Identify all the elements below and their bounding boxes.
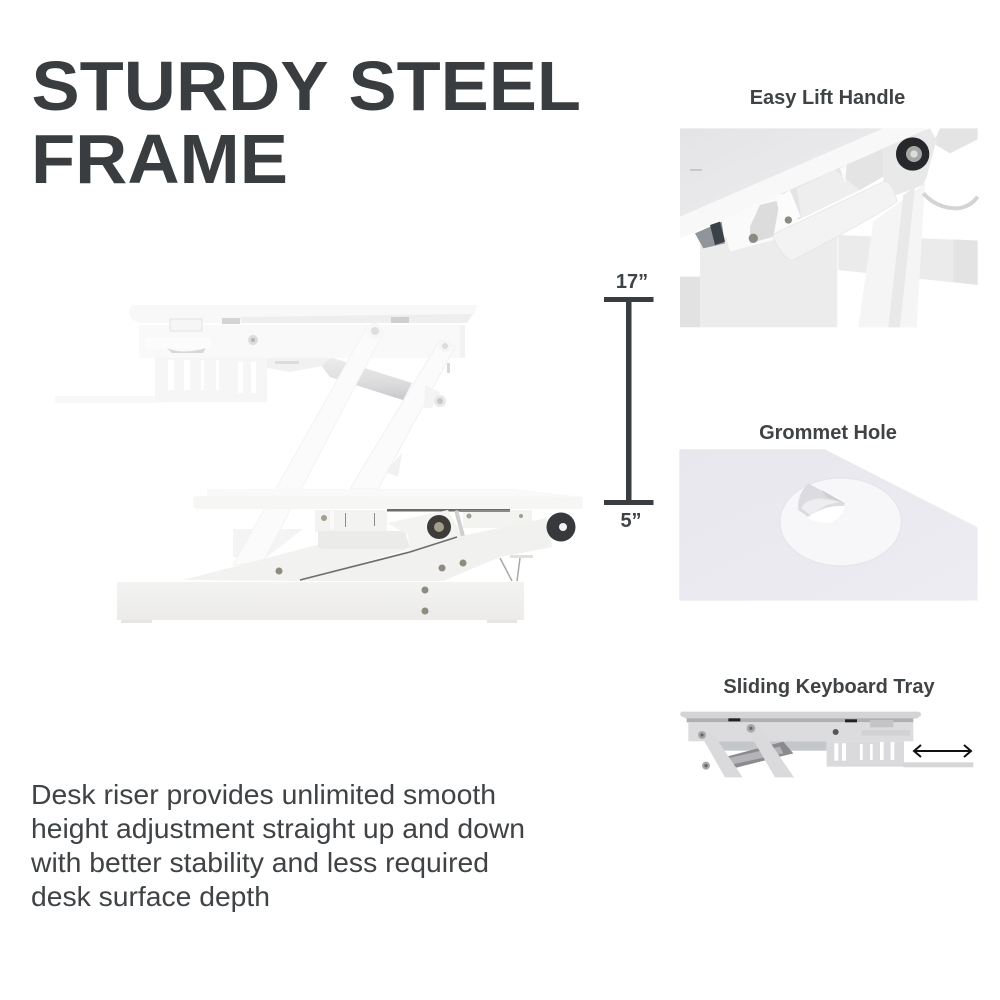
arrow: tray slide direction — [914, 745, 971, 757]
label: 17 inches: 17” — [616, 271, 648, 293]
photo: sliding keyboard tray — [680, 712, 973, 777]
height scale — [604, 271, 654, 532]
upper bracket rail — [139, 319, 465, 358]
title — [31, 47, 581, 198]
heading: sliding keyboard tray: Sliding Keyboard Tray — [723, 676, 935, 698]
keyboard tray and basket — [55, 358, 330, 403]
lower scissor arm, rear plate — [183, 545, 410, 581]
label: 5 inches: 5” — [620, 510, 642, 532]
lower mechanism and paddle — [315, 509, 532, 552]
photo: grommet hole — [679, 449, 978, 601]
front scissor arm, long — [233, 323, 383, 565]
lower scissor arm, front plate — [301, 518, 552, 581]
rear scissor arm shadow — [233, 529, 303, 557]
cable — [500, 555, 533, 581]
title: STURDY — [32, 47, 328, 125]
heading: grommet hole: Grommet Hole — [759, 422, 897, 444]
description text — [30, 779, 525, 912]
lower arm bolts — [276, 560, 466, 574]
scissor gap line — [300, 537, 457, 580]
description text: height adjustment straight up and down — [31, 813, 525, 844]
front scissor arm, short — [350, 340, 455, 489]
upper desktop plate — [129, 305, 477, 324]
product photo: white desk riser side view — [55, 305, 583, 623]
lower work surface — [193, 489, 583, 509]
title: STEEL — [348, 47, 581, 125]
heading: easy lift handle: Easy Lift Handle — [750, 87, 905, 109]
description text: desk surface depth — [31, 881, 270, 912]
photo: easy lift handle — [680, 128, 978, 327]
title: FRAME — [31, 120, 288, 198]
gas piston — [317, 358, 412, 400]
black knobs — [427, 512, 576, 542]
description text: with better stability and less required — [30, 847, 489, 878]
base — [117, 582, 524, 623]
description text: Desk riser provides unlimited smooth — [31, 779, 496, 810]
